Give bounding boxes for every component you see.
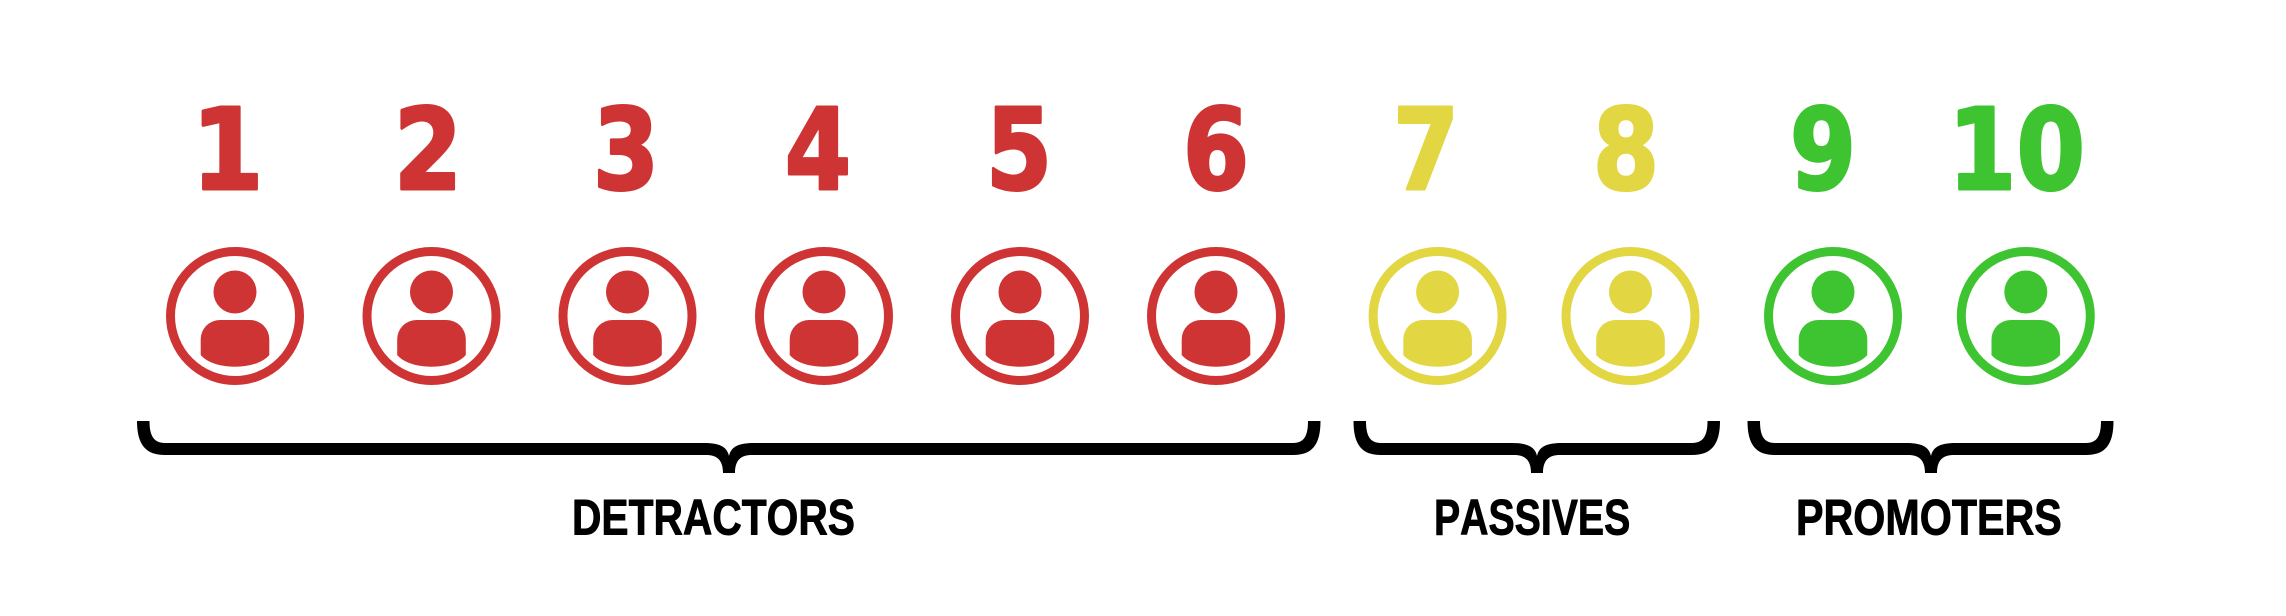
label: detractors: DETRACTORS [572,490,855,545]
label: promoters: PROMOTERS [1796,490,2062,545]
icon: person 10 [1961,252,2090,380]
icon: person 6 [1152,252,1280,380]
icon: person 3 [563,252,692,380]
score number 7: 7 [1393,86,1459,216]
score number 3: 3 [593,86,659,216]
score number 1: 1 [191,85,264,216]
icon: person 2 [367,252,496,380]
label: passives: PASSIVES [1434,489,1630,546]
brace: passives [1354,421,1720,473]
score number 9: 9 [1790,86,1856,216]
icon: person 4 [760,252,888,380]
brace: detractors [137,421,1320,473]
score number 8: 8 [1593,86,1659,216]
score number 6: 6 [1183,86,1249,216]
icon: person 5 [956,252,1084,380]
icon: person 8 [1566,252,1695,380]
icon: person 7 [1373,252,1502,380]
brace: promoters [1748,421,2114,473]
score number 4: 4 [785,86,851,216]
score number 2: 2 [394,85,462,216]
score number 5: 5 [986,86,1052,216]
score number 10: 10 [1948,85,2085,216]
icon: person 9 [1768,252,1898,380]
icon: person 1 [170,252,300,380]
